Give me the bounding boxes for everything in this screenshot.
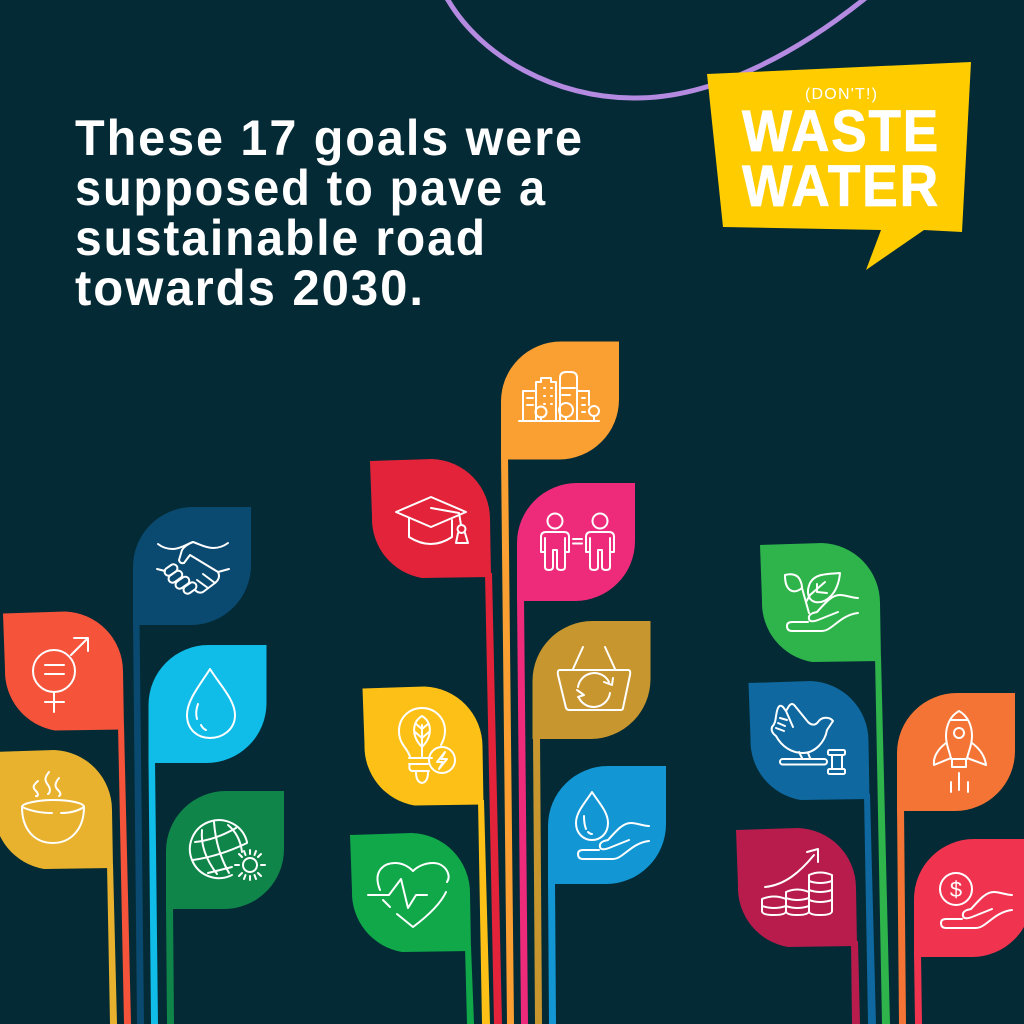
leaf: clean water (148, 645, 266, 1024)
headline: sustainable road (75, 210, 487, 266)
headline: towards 2030. (75, 260, 425, 316)
headline: supposed to pave a (75, 160, 547, 216)
icon: bowl (22, 772, 84, 843)
headline: These 17 goals were (75, 110, 584, 166)
icon: dove and gavel (772, 704, 845, 774)
icon: light bulb with leaf and bolt (399, 708, 455, 783)
leaf: life on land plant in hand (760, 543, 890, 1024)
leaf: innovation rocket (897, 693, 1015, 1024)
speech bubble: (don't!) waste water (707, 62, 971, 270)
leaf: decent work coins (736, 828, 860, 1024)
leaf: no poverty (914, 839, 1024, 1024)
icon: graduation cap (396, 497, 468, 544)
icon: two equal people (541, 514, 614, 570)
leaf: life below water drop in hand (548, 766, 666, 1024)
speech bubble: (don't!) waste water: (DON'T!) (805, 86, 877, 103)
icon: city skyline (519, 372, 599, 421)
purple circle arc (441, 0, 872, 98)
leaf: peace and justice (748, 681, 876, 1024)
icon: drop over hand (576, 792, 649, 859)
icon: handshake (157, 542, 229, 595)
leaf: gender equality (3, 612, 131, 1024)
icon: rocket (934, 711, 986, 792)
speech bubble: (don't!) waste water: WASTE (742, 99, 940, 164)
leaf: partnerships handshake (133, 507, 251, 1024)
icon: water drop (187, 669, 235, 738)
icon: seedling in hand (785, 573, 858, 631)
leaf: sustainable cities (501, 342, 619, 1024)
icon: basket with recycling arrows (558, 647, 630, 710)
leaf: responsible consumption (532, 621, 650, 1024)
headline (75, 110, 584, 316)
leaf: reduced inequalities (517, 483, 635, 1024)
icon: globe and sun (190, 820, 265, 880)
leaf: clean energy (362, 686, 490, 1024)
speech bubble: (don't!) waste water: WATER (742, 154, 940, 219)
leaf: climate action (166, 791, 284, 1024)
leaf: quality education (370, 459, 502, 1024)
leaf: good health (350, 833, 474, 1024)
icon: dollar coin over hand (940, 873, 1012, 928)
icon: heart with pulse (368, 863, 449, 927)
leaf: zero hunger (0, 750, 117, 1024)
icon: coins and rising arrow (762, 849, 832, 915)
icon: dollar coin over hand: $ (950, 877, 962, 902)
icon: gender symbol (33, 638, 88, 712)
